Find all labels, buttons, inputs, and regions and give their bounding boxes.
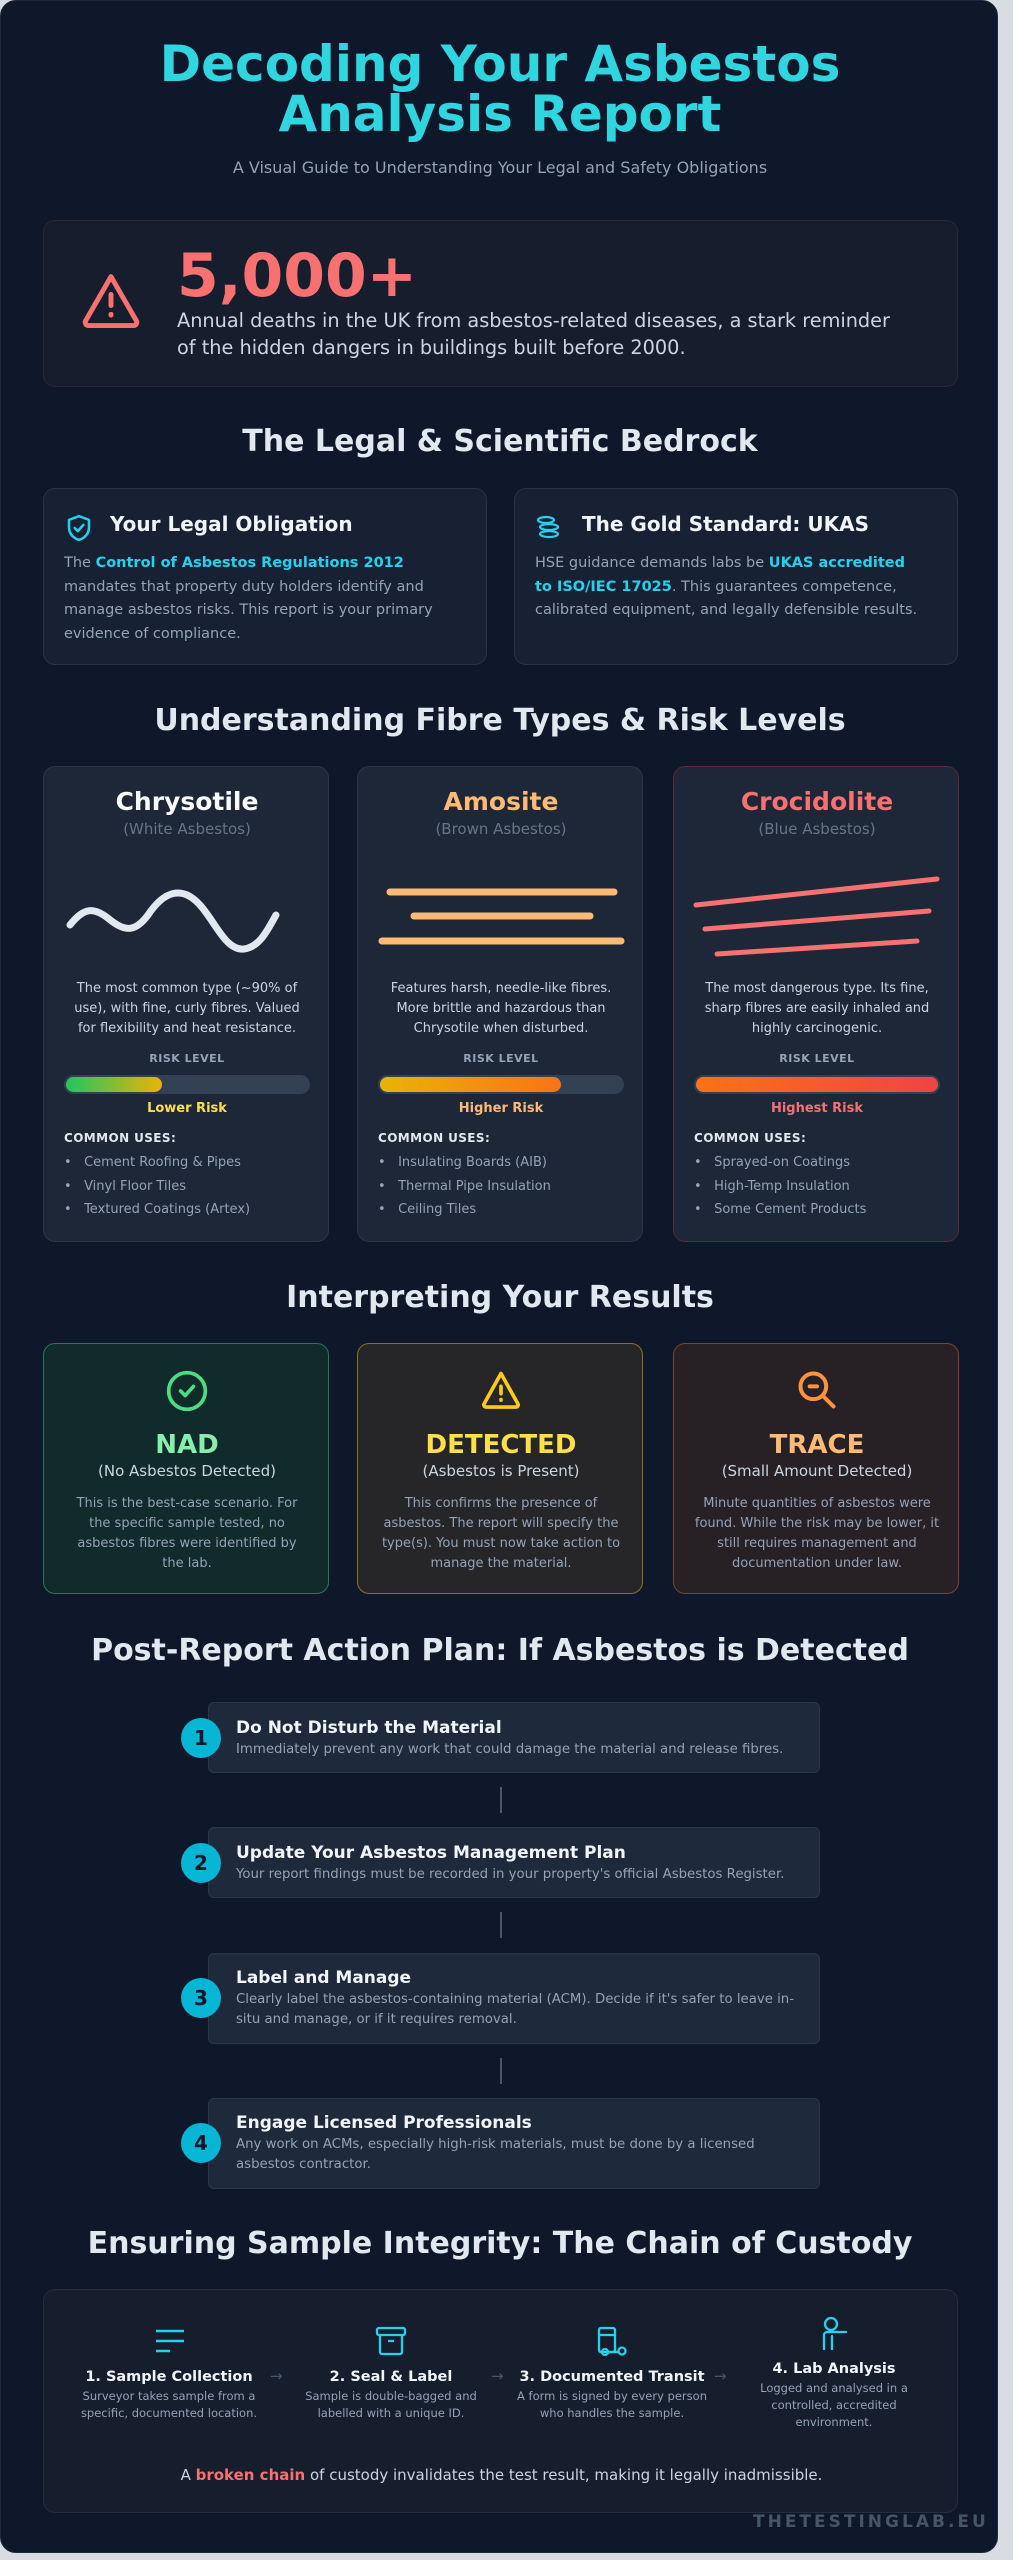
title: Amosite <box>444 787 558 816</box>
step number 1 <box>181 1718 221 1758</box>
subtitle: (No Asbestos Detected) <box>98 1462 276 1480</box>
step number 2: 2 <box>194 1851 208 1875</box>
title: Analysis Report <box>279 85 721 143</box>
risk meter: RISK LEVEL <box>779 1052 855 1065</box>
common uses: • Sprayed-on Coatings <box>694 1155 850 1170</box>
step number 3: 3 <box>194 1986 208 2010</box>
panel: trace <box>673 1343 959 1594</box>
step number 2 <box>181 1843 221 1883</box>
common uses: • High-Temp Insulation <box>694 1178 850 1194</box>
risk meter <box>64 1052 310 1116</box>
description: This confirms the presence of asbestos. The report will specify the type(s). You must now take action to manage the material. <box>382 1496 620 1571</box>
common uses: COMMON USES: <box>64 1131 176 1145</box>
title: DETECTED <box>426 1430 576 1460</box>
icon: warning <box>82 274 140 328</box>
stage 2 <box>305 2326 477 2420</box>
step number 3 <box>181 1978 221 2018</box>
stat description: Annual deaths in the UK from asbestos-related diseases, a stark reminder <box>177 309 890 332</box>
common uses: • Textured Coatings (Artex) <box>64 1202 250 1217</box>
body text: to ISO/IEC 17025. This guarantees competence, calibrated equipment, and legally defensible results. <box>535 578 917 618</box>
footnote: A broken chain of custody invalidates the test result, making it legally inadmissible. <box>181 2466 822 2484</box>
description: Minute quantities of asbestos were found. While the risk may be lower, it still requires management and documentation under law. <box>695 1496 939 1571</box>
heading: legal: The Legal & Scientific Bedrock <box>242 424 758 459</box>
step 4 <box>208 2098 820 2189</box>
step 1 <box>208 1702 820 1773</box>
risk meter <box>378 1052 624 1116</box>
subtitle: (White Asbestos) <box>123 820 251 838</box>
panel: detected <box>357 1343 643 1594</box>
body text: The Control of Asbestos Regulations 2012 mandates that property duty holders identify and manage asbestos risks. This report is your primary evidence of compliance. <box>64 555 433 642</box>
panel: amosite <box>357 766 643 1242</box>
risk meter: RISK LEVEL <box>149 1052 225 1065</box>
stage 1: Surveyor takes sample from a specific, documented location. <box>81 2389 257 2420</box>
title: Chrysotile <box>116 787 258 816</box>
body text: HSE guidance demands labs be UKAS accredited <box>535 555 905 571</box>
common uses: • Ceiling Tiles <box>378 1202 476 1217</box>
stage 3: 3. Documented Transit <box>519 2369 705 2385</box>
common uses: • Vinyl Floor Tiles <box>64 1178 186 1194</box>
panel: crocidolite <box>673 766 959 1242</box>
stage 4 <box>760 2316 908 2429</box>
common uses: • Some Cement Products <box>694 1202 866 1217</box>
desc: asbestos contractor. <box>236 2157 371 2172</box>
subtitle: (Asbestos is Present) <box>422 1462 580 1480</box>
title: Do Not Disturb the Material <box>236 1718 502 1738</box>
title: TRACE <box>770 1430 864 1460</box>
step number 4: 4 <box>194 2131 208 2155</box>
panel: legal obligation <box>43 488 487 665</box>
stage 2: 2. Seal & Label <box>330 2369 452 2385</box>
risk meter: Highest Risk <box>771 1101 863 1116</box>
stage 4: 4. Lab Analysis <box>772 2361 896 2377</box>
common uses: COMMON USES: <box>694 1131 806 1145</box>
step number 4 <box>181 2123 221 2163</box>
common uses <box>378 1131 551 1217</box>
desc: Any work on ACMs, especially high-risk materials, must be done by a licensed <box>236 2137 755 2152</box>
icon: warning <box>482 1372 520 1409</box>
icon: box <box>376 2326 406 2356</box>
risk meter: Higher Risk <box>459 1101 543 1116</box>
stage 1 <box>81 2330 257 2420</box>
title: Label and Manage <box>236 1968 411 1988</box>
stat description <box>177 309 890 359</box>
common uses: • Insulating Boards (AIB) <box>378 1155 547 1170</box>
icon: magnifier <box>798 1372 836 1409</box>
stage 2: Sample is double-bagged and labelled with a unique ID. <box>305 2389 477 2420</box>
risk meter: Lower Risk <box>147 1101 227 1116</box>
common uses: • Thermal Pipe Insulation <box>378 1178 551 1194</box>
common uses: COMMON USES: <box>378 1131 490 1145</box>
heading: action plan: Post-Report Action Plan: If Asbestos is Detected <box>91 1633 909 1668</box>
desc: Immediately prevent any work that could damage the material and release fibres. <box>236 1742 783 1757</box>
icon: check circle <box>166 1370 208 1412</box>
heading: fibre types: Understanding Fibre Types & Risk Levels <box>154 703 846 738</box>
icon: list <box>156 2330 184 2352</box>
desc: Your report findings must be recorded in your property's official Asbestos Register. <box>236 1867 784 1882</box>
icon: coins <box>536 516 560 538</box>
stat box <box>43 220 958 387</box>
desc <box>236 2137 755 2172</box>
common uses <box>694 1131 866 1217</box>
step 2 <box>208 1827 820 1898</box>
heading: results: Interpreting Your Results <box>286 1280 714 1315</box>
heading: Your Legal Obligation <box>110 512 353 536</box>
panel: chain of custody <box>43 2289 958 2513</box>
description: The most dangerous type. Its fine, sharp fibres are easily inhaled and highly carcinogenic. <box>705 981 929 1036</box>
icon: transit <box>598 2326 627 2356</box>
icon: shield <box>68 514 90 542</box>
title: Update Your Asbestos Management Plan <box>236 1843 626 1863</box>
risk meter <box>694 1052 940 1116</box>
stage 1: 1. Sample Collection <box>85 2369 253 2385</box>
illustration: curly fibre <box>66 890 280 953</box>
description: This is the best-case scenario. For the specific sample tested, no asbestos fibres were identified by the lab. <box>77 1496 297 1571</box>
illustration: sharp fibres <box>694 876 940 956</box>
panel: UKAS <box>514 488 958 665</box>
title: Decoding Your Asbestos <box>160 35 840 93</box>
heading: The Gold Standard: UKAS <box>582 512 869 536</box>
title: Engage Licensed Professionals <box>236 2113 532 2133</box>
subtitle: (Blue Asbestos) <box>758 820 876 838</box>
title: NAD <box>155 1430 219 1460</box>
illustration: straight fibres <box>378 888 624 944</box>
body text <box>535 555 917 618</box>
subtitle: (Small Amount Detected) <box>722 1462 912 1480</box>
arrow: → <box>714 2367 727 2385</box>
arrow: → <box>491 2367 504 2385</box>
step 3 <box>208 1953 820 2044</box>
description: The most common type (~90% of use), with fine, curly fibres. Valued for flexibility and heat resistance. <box>74 981 300 1036</box>
common uses: • Cement Roofing & Pipes <box>64 1155 241 1170</box>
stage 3: A form is signed by every person who handles the sample. <box>517 2389 707 2420</box>
watermark: THETESTINGLAB.EU <box>753 2512 989 2532</box>
heading: chain of custody: Ensuring Sample Integrity: The Chain of Custody <box>88 2226 912 2261</box>
step number 1: 1 <box>194 1726 208 1750</box>
common uses <box>64 1131 250 1217</box>
stage 4: Logged and analysed in a controlled, accredited environment. <box>760 2381 908 2429</box>
arrow: → <box>270 2367 283 2385</box>
risk meter: RISK LEVEL <box>463 1052 539 1065</box>
icon: lab person <box>822 2316 848 2350</box>
stat number: 5,000+ <box>177 241 417 311</box>
stat description: of the hidden dangers in buildings built before 2000. <box>177 336 686 359</box>
title: Crocidolite <box>741 787 893 816</box>
title <box>160 35 840 143</box>
desc: Clearly label the asbestos-containing material (ACM). Decide if it's safer to leave in-situ and manage, or if it requires removal. <box>236 1992 794 2027</box>
stage 3 <box>517 2326 707 2420</box>
panel: chrysotile <box>43 766 329 1242</box>
subtitle: (Brown Asbestos) <box>435 820 567 838</box>
panel: NAD <box>43 1343 329 1594</box>
description: Features harsh, needle-like fibres. More brittle and hazardous than Chrysotile when disturbed. <box>391 981 611 1036</box>
subtitle: A Visual Guide to Understanding Your Legal and Safety Obligations <box>233 158 767 177</box>
